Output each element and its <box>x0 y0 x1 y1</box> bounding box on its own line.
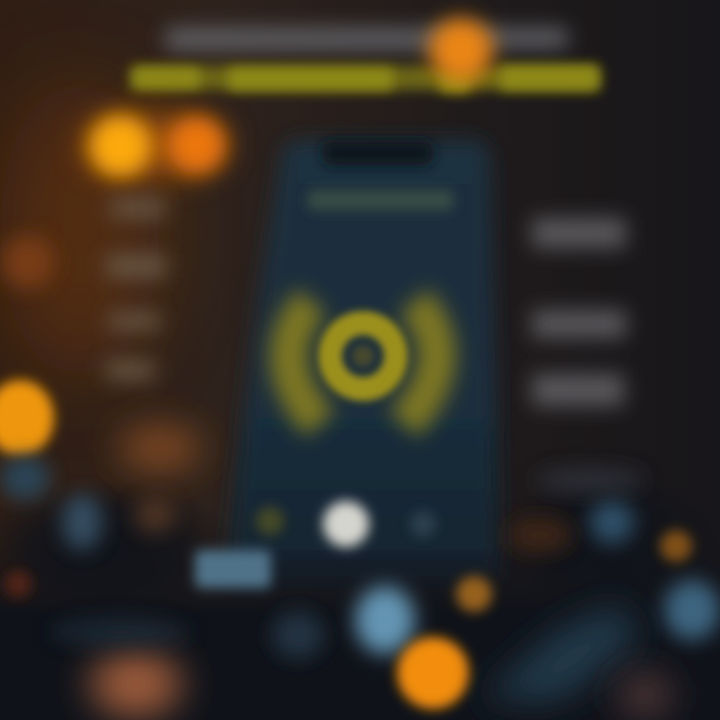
phone <box>226 140 500 590</box>
glowing orb: left bright <box>0 380 54 456</box>
phone buttons <box>256 501 436 547</box>
red spot left <box>4 570 32 598</box>
right waves <box>404 302 437 424</box>
right text column <box>532 218 626 406</box>
blue block centre <box>195 550 271 588</box>
round button: olive <box>256 507 284 535</box>
small orange spot right <box>660 530 692 562</box>
title: blurred headline <box>130 28 600 92</box>
yellow signal icon <box>289 302 437 424</box>
dark blue spot <box>272 611 324 659</box>
phone header text <box>308 190 453 210</box>
icon ring <box>330 323 396 389</box>
left text column <box>106 198 166 380</box>
glowing orbs: top left <box>85 115 226 177</box>
left orange haze <box>118 424 202 472</box>
left waves <box>289 302 320 424</box>
glowing orb: left dim <box>1 235 55 289</box>
phone body <box>226 140 500 590</box>
rust haze right <box>508 517 572 553</box>
small orange spot <box>456 576 492 612</box>
muted pink orb bottom right <box>617 671 673 719</box>
blue circle lower centre <box>355 586 415 654</box>
dark floor <box>0 545 720 720</box>
title line one <box>165 28 568 50</box>
title line two base haze <box>130 66 600 90</box>
pale orange orb bottom left <box>90 650 182 718</box>
round button: dim <box>410 511 436 537</box>
phone notch <box>322 140 434 166</box>
dark floor left haze <box>0 480 240 620</box>
blue block left <box>0 456 50 500</box>
bottom foreground clutter <box>0 424 720 719</box>
right blue blocks <box>590 500 634 544</box>
dark floor right haze <box>500 470 720 620</box>
round button: bright <box>323 501 369 547</box>
icon centre <box>352 345 374 367</box>
glowing orb: top centre <box>429 18 493 82</box>
title line two <box>134 66 598 92</box>
bright orange orb bottom <box>397 637 469 709</box>
